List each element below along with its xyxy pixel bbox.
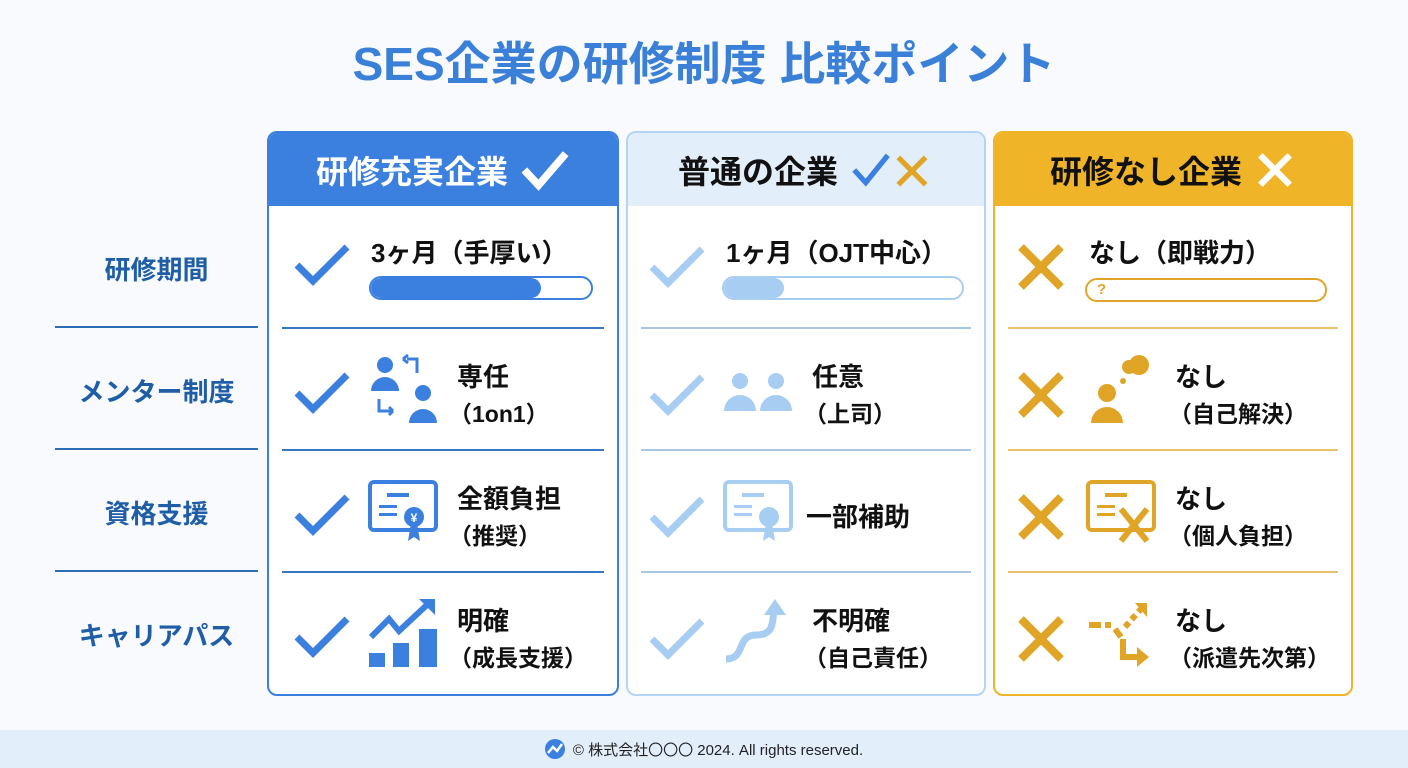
row3 content: 一部補助 [806, 502, 910, 532]
footer [0, 730, 1408, 768]
header [995, 133, 1351, 206]
icon: logo [545, 739, 565, 759]
row1 content [650, 238, 964, 300]
panel: 研修なし企業 [993, 131, 1353, 696]
row2 content [1018, 355, 1307, 427]
title: SES企業の研修制度 比較ポイント [353, 38, 1055, 90]
row4 content [1018, 603, 1330, 671]
panel: 普通の企業 [626, 131, 986, 696]
row2 content: 専任 [457, 362, 509, 392]
row labels [78, 255, 234, 651]
row4 content: （派遣先次第） [1169, 645, 1330, 671]
row2 content: （自己解決） [1169, 401, 1307, 427]
header [628, 133, 984, 206]
row3 content: ¥ [411, 511, 418, 525]
label: メンター制度: メンター制度 [78, 377, 234, 407]
row1 content: ? [1097, 281, 1106, 298]
row3 content [650, 480, 910, 541]
row3 content: （個人負担） [1169, 523, 1307, 549]
row1 content: なし（即戦力） [1089, 238, 1271, 268]
header: 普通の企業 [678, 154, 838, 190]
label: キャリアパス: キャリアパス [79, 621, 234, 651]
row4 content: 不明確 [812, 606, 890, 636]
panel: 研修充実企業 [267, 131, 619, 696]
row1 content: 1ヶ月（OJT中心） [726, 238, 947, 268]
label: 研修期間: 研修期間 [104, 255, 208, 285]
row3 content [1018, 480, 1307, 549]
row2 content: （上司） [804, 401, 896, 427]
row2 content [294, 354, 549, 427]
header [269, 133, 617, 206]
header: 研修充実企業 [316, 154, 508, 190]
footer: © 株式会社〇〇〇 2024. All rights reserved. [573, 742, 863, 758]
row1 content: 3ヶ月（手厚い） [371, 238, 567, 268]
row4 content: （成長支援） [449, 645, 587, 671]
row4 content: （自己責任） [804, 645, 942, 671]
row3 content: （推奨） [449, 523, 541, 549]
row1 content [294, 238, 593, 300]
row3 content [294, 480, 561, 549]
row4 content: 明確 [457, 606, 509, 636]
header: 研修なし企業 [1050, 154, 1242, 190]
row3 content: 全額負担 [457, 484, 561, 514]
row2 content [650, 362, 896, 427]
row3 content: なし [1175, 484, 1227, 514]
label: 資格支援: 資格支援 [104, 499, 208, 529]
row4 content [650, 599, 942, 671]
row4 content: なし [1175, 606, 1227, 636]
row4 content [294, 599, 587, 671]
row2 content: なし [1175, 362, 1227, 392]
row2 content: （1on1） [449, 401, 549, 427]
row1 content [1018, 238, 1327, 302]
row2 content: 任意 [812, 362, 864, 392]
